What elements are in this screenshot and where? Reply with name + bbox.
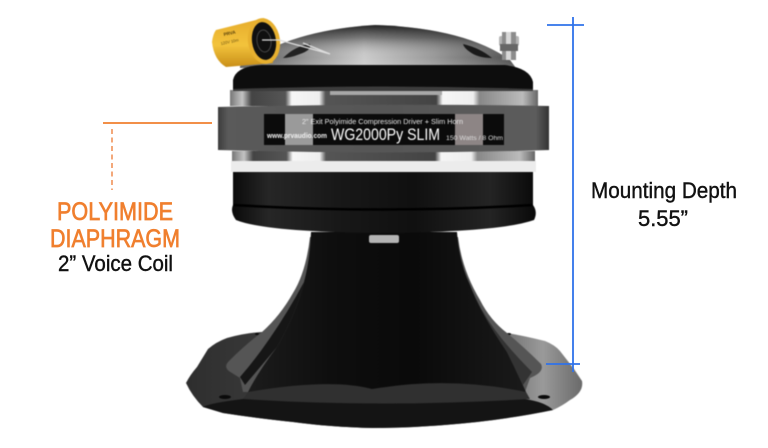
metal dome [240,25,516,68]
horn lower shadow lip [203,399,553,428]
flange seam [233,205,533,210]
capacitor wire [262,40,330,54]
mounting depth label [591,178,737,231]
horn side ridges [226,237,542,392]
label text: 2” Exit Polyimide Compression Driver + Slim Horn [302,117,463,126]
left ridge shadow [240,282,304,385]
mounting depth label: 5.55” [638,206,688,231]
callout: polyimide diaphragm: 2” Voice Coil [58,251,173,276]
horn throat [248,232,526,392]
black top cap [233,65,533,90]
dome slots [283,44,310,58]
product label: WG2000Py SLIM [331,126,440,144]
cap highlight [233,86,533,91]
connector post [499,32,519,60]
orange callout leader line [103,122,212,124]
dome shading [240,25,516,68]
label reflections [285,114,313,145]
upper ring top strip [330,90,442,95]
product label: www.prvaudio.com [266,131,327,140]
mounting depth label: Mounting Depth [591,178,737,203]
horn nut [369,235,399,243]
speaker driver product [186,16,582,428]
upper silver ring [230,90,538,106]
yellow capacitor [212,16,330,67]
callout: polyimide diaphragm: DIAPHRAGM [50,225,180,253]
mounting holes [219,333,550,399]
right ridge shadow [470,285,532,385]
grey clamp band [218,105,549,152]
driver lower black body [232,172,536,233]
yellow capacitor: 120V 10m [220,37,240,46]
capacitor text: PRVA [223,29,237,37]
callout: polyimide diaphragm [50,198,180,276]
callout: polyimide diaphragm: POLYIMIDE [57,198,173,226]
blue depth dimension line [546,17,584,372]
product label: 150 Watts / 8 Ohm [446,135,503,142]
product label [264,114,504,145]
lower silver ring [232,151,535,162]
horn mounting flange [186,332,582,428]
horn lip [243,383,530,404]
white ring [231,161,536,172]
orange dashed connector [111,129,113,190]
